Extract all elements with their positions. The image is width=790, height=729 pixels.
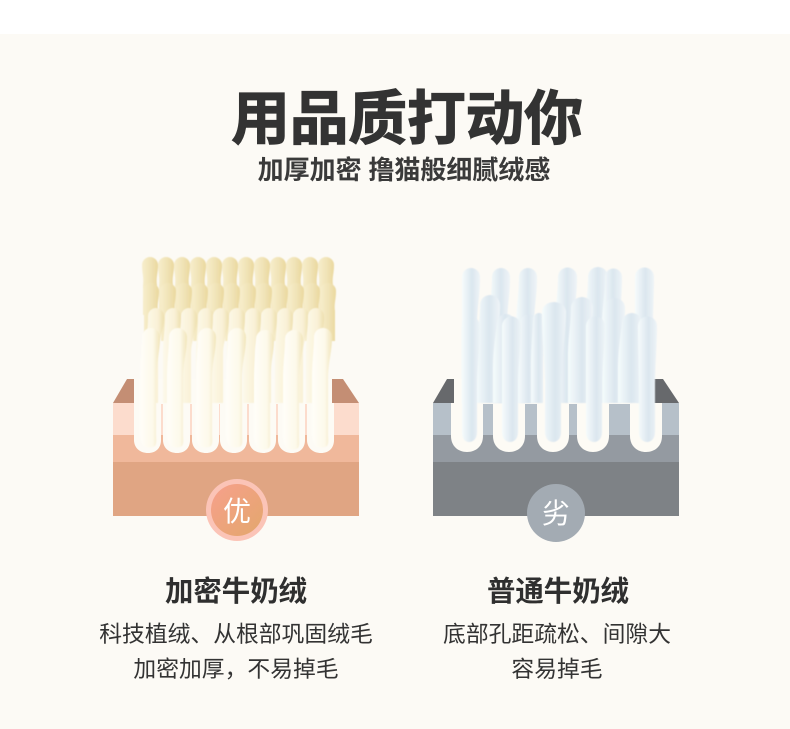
- back row fibres: [462, 267, 654, 403]
- diagram: superior dense plush: [113, 257, 359, 541]
- badge: ordinary: 劣: [542, 498, 570, 529]
- back row fibres: [142, 257, 336, 341]
- badge: superior: 优: [223, 496, 251, 527]
- skin block: superior: [113, 379, 359, 516]
- right description: 底部孔距疏松、间隙大: [443, 621, 671, 647]
- right description: [443, 621, 671, 682]
- front row fibres: [140, 328, 332, 450]
- middle row fibres: [493, 313, 642, 403]
- left description: [99, 621, 373, 682]
- subtitle: 加厚加密 撸猫般细腻绒感: [258, 155, 550, 185]
- right description: 容易掉毛: [511, 656, 603, 682]
- badge: superior: [206, 479, 268, 541]
- left heading: 加密牛奶绒: [165, 576, 307, 608]
- left description: 加密加厚，不易掉毛: [133, 656, 339, 682]
- white root sockets: [451, 379, 662, 452]
- left description: 科技植绒、从根部巩固绒毛: [99, 621, 373, 647]
- diagram: ordinary plush: [433, 267, 679, 542]
- front row fibres: [462, 302, 657, 442]
- white root sockets: [134, 379, 334, 453]
- middle row fibres: [146, 308, 324, 403]
- right heading: 普通牛奶绒: [487, 576, 629, 608]
- badge: ordinary: [527, 484, 585, 542]
- title: 用品质打动你: [231, 87, 583, 152]
- skin block: ordinary: [433, 379, 679, 516]
